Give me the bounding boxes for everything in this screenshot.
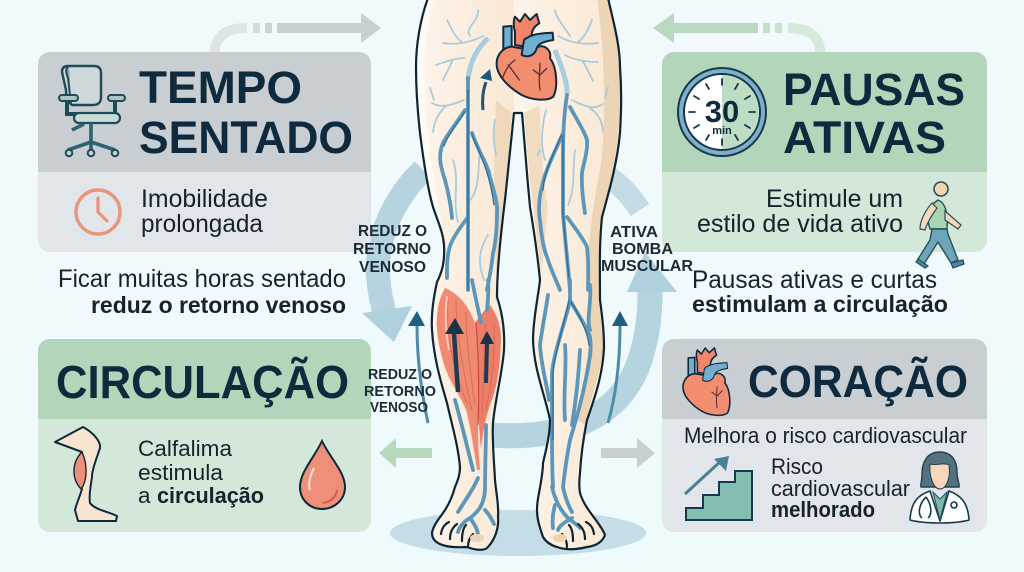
- label: ativa bomba muscular: [601, 224, 693, 275]
- icon: office chair: [59, 66, 125, 156]
- feet details: [441, 522, 594, 547]
- icon: leg with calf: [55, 427, 117, 521]
- icon: clock: [76, 190, 120, 234]
- text: calfalima estimula: estimula: [138, 460, 223, 485]
- icon: blood drop: [300, 441, 345, 509]
- icon: doctor: [910, 452, 969, 523]
- text: estimule um estilo: [697, 185, 903, 238]
- icon: 30 minute timer: 30: [705, 94, 739, 129]
- text: melhora o risco: Melhora o risco cardiovascular: [684, 423, 967, 448]
- arrow: thin right upward: [608, 311, 628, 423]
- heading: pausas ativas: [783, 64, 965, 163]
- arrow: middle left green: [379, 438, 432, 468]
- calf muscles: [437, 288, 480, 470]
- heading: coração: CORAÇÃO: [748, 356, 968, 407]
- text: estimule um estilo: Estimule um: [766, 185, 903, 213]
- leg outlines: [416, 0, 621, 550]
- veins, left leg: [430, 10, 496, 280]
- text: calfalima estimula: Calfalima: [138, 436, 232, 461]
- label: reduz o retorno venoso lower: REDUZ O: [368, 366, 432, 383]
- text: calfalima estimula: a: [138, 483, 151, 508]
- panel: pausas ativas: [662, 52, 987, 268]
- label: ativa bomba muscular: ATIVA: [610, 224, 658, 241]
- arrow: top left connector: [215, 13, 381, 52]
- text: ficar muitas horas: Ficar muitas horas sentado: [58, 265, 346, 293]
- label: reduz o retorno venoso upper: RETORNO: [353, 241, 431, 258]
- heading: tempo sentado: SENTADO: [139, 112, 353, 163]
- heading: tempo sentado: [139, 62, 353, 163]
- label: ativa bomba muscular: BOMBA: [612, 241, 673, 258]
- icon: 30 minute timer: [678, 68, 766, 156]
- text: pausas ativas e curtas: [692, 266, 948, 317]
- label: reduz o retorno venoso upper: REDUZ O: [358, 223, 427, 240]
- text: calfalima estimula: [138, 436, 264, 508]
- text: calfalima estimula: circulação: [157, 483, 264, 508]
- veins, right leg: [538, 10, 608, 205]
- text: imobilidade prolongada: Imobilidade: [141, 185, 268, 213]
- text: estimule um estilo: estilo de vida ativo: [697, 210, 903, 238]
- label: reduz o retorno venoso upper: VENOSO: [359, 259, 426, 276]
- arrow: thin left upward: [408, 311, 428, 423]
- icon: stairs with arrow: [685, 456, 752, 520]
- legs illustration: [416, 0, 621, 550]
- left leg: [416, 0, 522, 550]
- arrow: top right connector: [653, 13, 820, 52]
- text: risco cardiovascular melhorado: melhorado: [771, 497, 875, 522]
- text: ficar muitas horas: [58, 265, 346, 318]
- icon: walking person: [916, 182, 964, 268]
- heading: pausas ativas: ATIVAS: [783, 112, 946, 163]
- arrows: calf muscle pump: [445, 318, 494, 392]
- heading: circulação: CIRCULAÇÃO: [56, 356, 349, 408]
- text: pausas ativas e curtas: estimulam a circulação: [692, 291, 948, 317]
- icon: 30 minute timer: min: [712, 125, 732, 137]
- text: imobilidade prolongada: [141, 185, 268, 238]
- icon: central heart: [497, 14, 556, 100]
- right leg: [514, 0, 621, 549]
- panel: tempo sentado: [38, 52, 371, 252]
- arrow: thigh upward flow: [480, 69, 492, 110]
- text: risco cardiovascular melhorado: [771, 454, 910, 522]
- text: risco cardiovascular melhorado: cardiovascular: [771, 476, 910, 501]
- text: pausas ativas e curtas: Pausas ativas e curtas: [692, 266, 937, 294]
- label: reduz o retorno venoso upper: [353, 223, 431, 276]
- label: reduz o retorno venoso lower: VENOSO: [370, 399, 428, 416]
- panel: circulação: [38, 339, 371, 532]
- text: ficar muitas horas: reduz o retorno venoso: [91, 292, 346, 318]
- panel: coração: [662, 339, 987, 532]
- label: ativa bomba muscular: MUSCULAR: [601, 258, 693, 275]
- ground shadow: [390, 510, 646, 556]
- label: reduz o retorno venoso lower: [364, 366, 436, 416]
- text: imobilidade prolongada: prolongada: [141, 210, 263, 238]
- circular flow arrow: [362, 170, 677, 436]
- heading: tempo sentado: TEMPO: [139, 62, 302, 113]
- label: reduz o retorno venoso lower: RETORNO: [364, 383, 436, 400]
- arrow: middle right gray: [601, 438, 655, 468]
- text: risco cardiovascular melhorado: Risco: [771, 454, 823, 479]
- thigh shading: [494, 100, 512, 290]
- icon: small heart: [683, 348, 730, 415]
- heading: pausas ativas: PAUSAS: [783, 64, 965, 115]
